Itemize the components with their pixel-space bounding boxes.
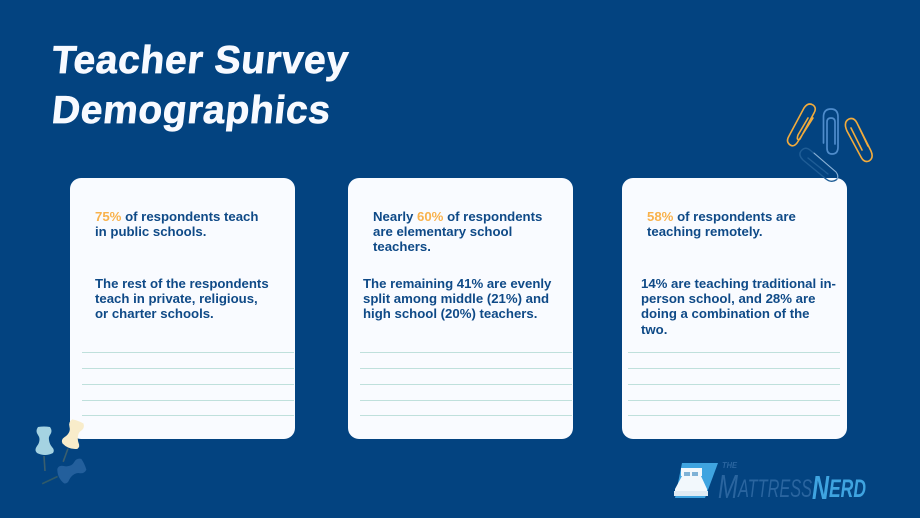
stat: public schools xyxy=(95,209,258,239)
notebook lines xyxy=(360,352,572,416)
text: in-person and combination: person school, and 28% are xyxy=(641,291,815,306)
title: Demographics xyxy=(50,89,333,132)
wordmark: N xyxy=(812,469,830,506)
wordmark: M xyxy=(718,468,738,505)
stat: remote teaching: teaching remotely. xyxy=(647,224,763,239)
icon: bed xyxy=(674,463,718,498)
text: middle and high school: The remaining 41% are evenly xyxy=(363,276,551,291)
wordmark xyxy=(718,461,866,506)
wordmark: ERD xyxy=(829,475,866,503)
text: in-person and combination: doing a combination of the xyxy=(641,306,810,321)
icon: paperclips xyxy=(788,104,872,181)
stat: elementary teachers: are elementary school xyxy=(373,224,512,239)
notebook lines xyxy=(82,352,294,416)
stat: elementary teachers: teachers. xyxy=(373,239,431,254)
wordmark: THE xyxy=(722,461,738,470)
logo: The Mattress Nerd xyxy=(674,461,866,506)
text: other school types: or charter schools. xyxy=(95,306,214,321)
icon: dark blue push pin xyxy=(39,456,88,493)
title xyxy=(50,39,351,132)
wordmark: ATTRESS xyxy=(737,475,812,503)
icon: light blue push pin xyxy=(36,426,54,471)
stat: remote teaching: 58% of respondents are xyxy=(647,209,796,224)
stat: remote teaching xyxy=(647,209,796,239)
title: Teacher Survey xyxy=(50,39,351,82)
text: middle and high school: high school (20%) teachers. xyxy=(363,306,537,321)
stat: elementary teachers: Nearly 60% of respondents xyxy=(373,209,542,224)
text: other school types: teach in private, religious, xyxy=(95,291,258,306)
stat: public schools: 75% of respondents teach xyxy=(95,209,258,224)
stat: elementary teachers xyxy=(373,209,542,254)
icon: cream push pin xyxy=(55,418,87,465)
panel: school type xyxy=(70,178,295,439)
stat: public schools: in public schools. xyxy=(95,224,206,239)
text: middle and high school: split among middle (21%) and xyxy=(363,291,549,306)
text: middle and high school xyxy=(363,276,552,321)
text: in-person and combination: 14% are teaching traditional in- xyxy=(641,276,836,291)
notebook lines xyxy=(628,352,840,416)
panel: grade level xyxy=(348,178,573,439)
text: in-person and combination xyxy=(641,276,836,337)
panel: teaching mode xyxy=(622,178,847,439)
text: other school types xyxy=(95,276,269,321)
text: in-person and combination: two. xyxy=(641,322,667,337)
text: other school types: The rest of the respondents xyxy=(95,276,269,291)
